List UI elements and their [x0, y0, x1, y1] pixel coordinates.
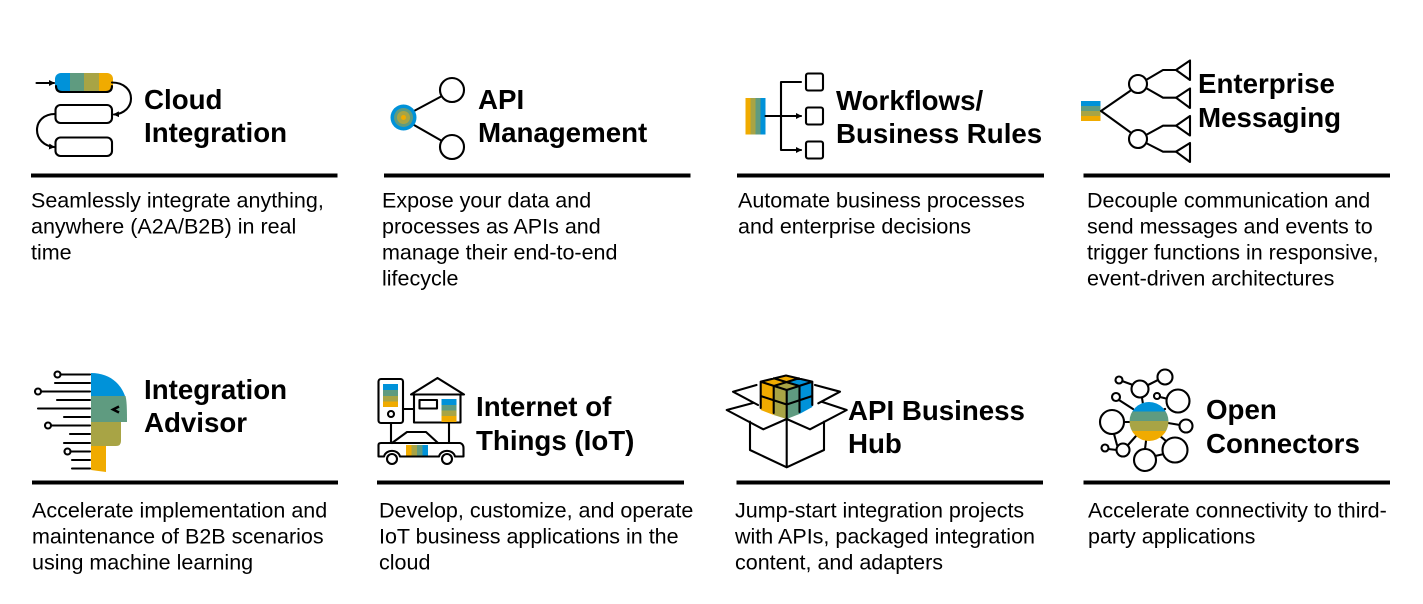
description	[32, 498, 327, 574]
description: Jump-start integration projects	[735, 498, 1024, 522]
heading: Integration Advisor: Advisor	[144, 407, 247, 438]
description: processes as APIs and	[382, 214, 601, 238]
description: using machine learning	[32, 550, 253, 574]
icon: connector network	[1100, 370, 1192, 471]
divider rule	[736, 480, 1043, 484]
heading: Open Connectors	[1206, 394, 1360, 459]
heading: Internet of Things: Things (IoT)	[476, 425, 634, 456]
description	[734, 498, 1035, 574]
description: maintenance of B2B scenarios	[32, 524, 324, 548]
divider rule	[32, 480, 338, 484]
description: party applications	[1088, 524, 1255, 548]
heading: Cloud Integration: Integration	[144, 117, 287, 148]
heading: Cloud Integration: Cloud	[144, 84, 222, 115]
description: manage their end-to-end	[382, 240, 617, 264]
description: Develop, customize, and operate	[379, 498, 693, 522]
description: Expose your data and	[382, 188, 591, 212]
heading: Integration Advisor	[144, 374, 287, 438]
divider rule	[1084, 480, 1390, 484]
description: and enterprise decisions	[738, 214, 971, 238]
panel: API Management	[382, 78, 690, 290]
description: Decouple communication and	[1087, 188, 1370, 212]
panel: Cloud Integration	[31, 73, 338, 264]
panel: API Business Hub	[727, 375, 1043, 574]
panel: Enterprise Messaging	[1081, 60, 1390, 290]
divider rule	[1084, 174, 1390, 178]
icon: workflow tree	[746, 74, 823, 158]
icon: AI head with circuit lines	[35, 372, 127, 472]
heading: API Business Hub	[848, 395, 1025, 459]
heading: API Business Hub: API Business	[848, 395, 1025, 426]
heading: Enterprise Messaging: Enterprise	[1198, 68, 1335, 99]
description: trigger functions in responsive,	[1087, 240, 1379, 264]
heading: Cloud Integration	[144, 84, 287, 148]
heading: Enterprise Messaging: Messaging	[1198, 102, 1341, 133]
description: Accelerate connectivity to third-	[1088, 498, 1387, 522]
icon: phone, house and car	[378, 378, 464, 464]
heading: Internet of Things: Internet of	[476, 391, 612, 422]
description: Automate business processes	[738, 188, 1025, 212]
heading: Open Connectors: Open	[1206, 394, 1277, 425]
panel: Open Connectors	[1084, 370, 1390, 548]
heading: Workflows / Business Rules	[836, 85, 1042, 149]
heading: Workflows / Business Rules: Business Rules	[836, 118, 1042, 149]
icon: messaging tree	[1081, 60, 1190, 162]
panel: Integration Advisor	[32, 372, 338, 574]
panel: Internet of Things	[377, 378, 693, 574]
description: time	[31, 240, 72, 264]
description: content, and adapters	[735, 550, 943, 574]
description	[379, 498, 693, 574]
description: IoT business applications in the	[379, 524, 679, 548]
heading: Internet of Things	[476, 391, 634, 456]
heading: Enterprise Messaging	[1198, 68, 1341, 133]
heading: API Management	[478, 84, 647, 148]
divider rule	[377, 480, 684, 484]
description: cloud	[379, 550, 430, 574]
divider rule	[737, 174, 1044, 178]
heading: API Management: Management	[478, 117, 647, 148]
description: event-driven architectures	[1087, 266, 1334, 290]
icon: API share nodes	[390, 78, 464, 159]
description	[31, 188, 324, 264]
panel: Workflows / Business Rules	[737, 74, 1044, 238]
heading: Integration Advisor: Integration	[144, 374, 287, 405]
divider rule	[384, 174, 690, 178]
description: anywhere (A2A/B2B) in real	[31, 214, 296, 238]
divider rule	[31, 174, 338, 178]
heading: API Management: API	[478, 84, 524, 115]
description: send messages and events to	[1087, 214, 1373, 238]
heading: API Business Hub: Hub	[848, 428, 902, 459]
icon: open box with cube	[727, 375, 847, 467]
icon: cloud integration flow	[36, 73, 131, 156]
description	[1088, 498, 1387, 548]
description	[382, 188, 617, 290]
description	[1087, 188, 1379, 290]
description: Accelerate implementation and	[32, 498, 327, 522]
description: lifecycle	[382, 266, 458, 290]
description	[738, 188, 1025, 238]
description: with APIs, packaged integration	[734, 524, 1035, 548]
description: Seamlessly integrate anything,	[31, 188, 324, 212]
heading: Workflows / Business Rules: Workflows/	[836, 85, 983, 116]
heading: Open Connectors: Connectors	[1206, 428, 1360, 459]
